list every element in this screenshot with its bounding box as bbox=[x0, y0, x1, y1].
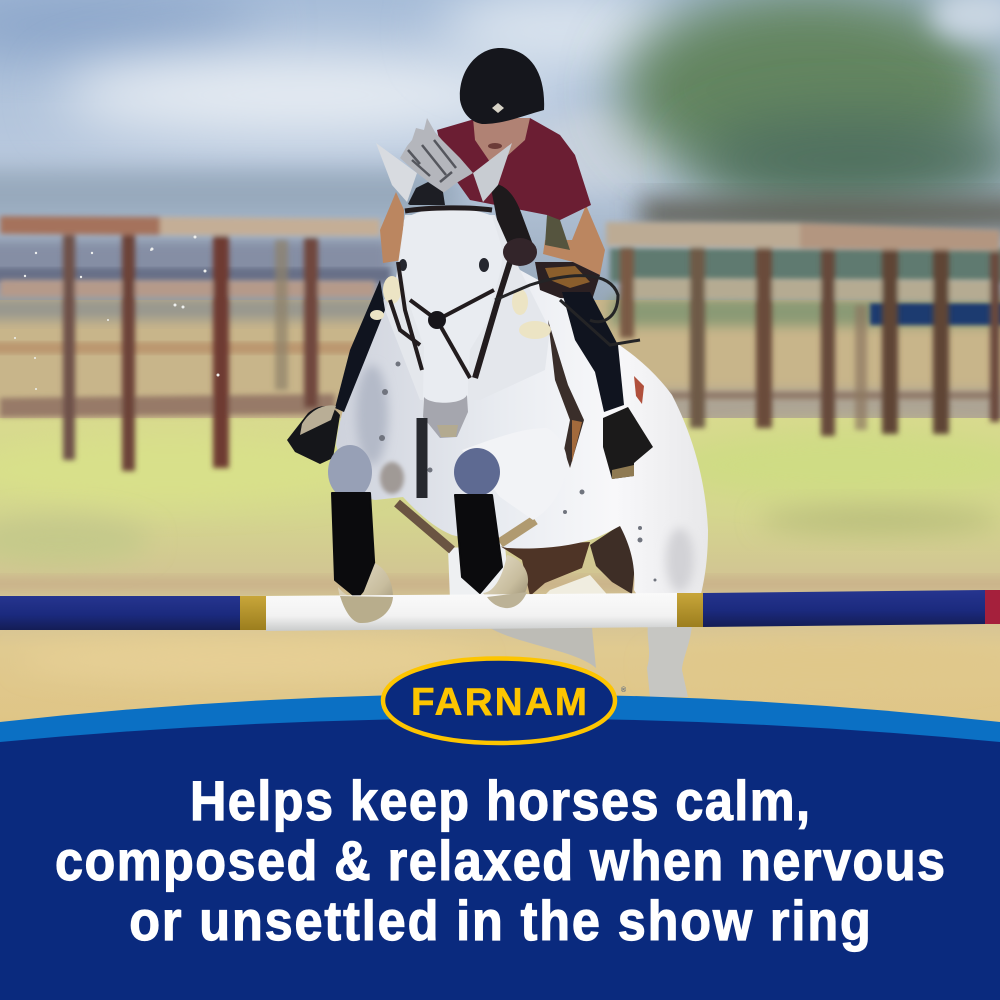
reins bbox=[495, 276, 640, 345]
forelock bbox=[408, 182, 445, 205]
coat speckles bbox=[379, 362, 656, 582]
light blue arc bbox=[0, 694, 1000, 760]
headline: composed & relaxed when nervous bbox=[55, 831, 945, 893]
horse neck bbox=[385, 215, 550, 400]
photo background: arena ground bbox=[0, 240, 1000, 738]
right stirrup and boot bbox=[603, 407, 653, 479]
saddle straps bbox=[548, 320, 584, 468]
logo: Farnam oval: ® bbox=[621, 686, 627, 694]
jump pole bbox=[0, 590, 1000, 631]
headline bbox=[55, 771, 945, 953]
navy panel bbox=[0, 718, 1000, 1000]
horse and rider bbox=[287, 48, 708, 697]
right foreleg bbox=[454, 428, 567, 608]
horse head bbox=[400, 208, 502, 438]
flying dust specks bbox=[14, 236, 220, 390]
banner bbox=[0, 694, 1000, 1000]
mane bbox=[400, 118, 473, 193]
bridle bbox=[390, 208, 510, 378]
red number patch bbox=[634, 376, 644, 404]
fleece pads bbox=[370, 276, 551, 339]
helmet bbox=[460, 48, 544, 124]
belly shadow bbox=[500, 525, 636, 596]
saddle flap under hand bbox=[535, 262, 600, 300]
left stirrup and boot bbox=[287, 406, 340, 464]
left foreleg bbox=[328, 445, 393, 623]
photo background: sky, clouds and trees bbox=[0, 0, 1000, 300]
girth strap bbox=[416, 418, 428, 498]
body shading bbox=[356, 365, 694, 592]
logo: Farnam oval bbox=[383, 658, 627, 743]
noseband knot bbox=[428, 311, 446, 329]
headline: or unsettled in the show ring bbox=[129, 891, 871, 953]
rein strap at neck bbox=[490, 183, 535, 250]
rider legs bbox=[335, 280, 385, 412]
muzzle bbox=[423, 395, 468, 438]
hooves over pole bbox=[340, 596, 393, 623]
eyes bbox=[399, 258, 489, 272]
rider torso bbox=[437, 118, 591, 221]
ears bbox=[376, 143, 417, 202]
logo: Farnam oval: FARNAM bbox=[411, 681, 587, 724]
arms bbox=[380, 192, 605, 275]
hind legs below the pole bbox=[448, 545, 692, 697]
headline: Helps keep horses calm, bbox=[190, 771, 810, 833]
shirt lower bbox=[545, 215, 570, 250]
rider face bbox=[473, 118, 530, 162]
gloved hand bbox=[503, 238, 537, 266]
horse body and chest bbox=[336, 270, 708, 625]
helmet badge bbox=[492, 103, 504, 113]
fence bbox=[0, 216, 1000, 471]
